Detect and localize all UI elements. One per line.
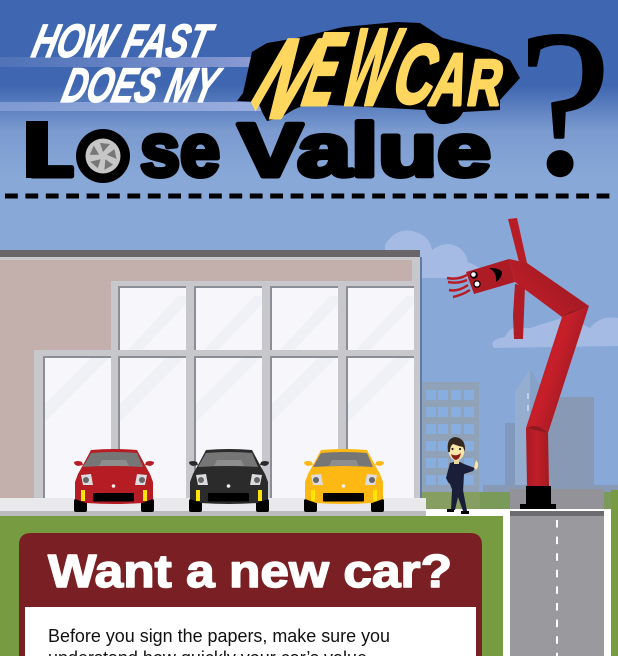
new car silhouette logo: R [462,47,509,120]
new car silhouette logo: A [423,38,480,121]
new car silhouette logo: W [328,6,414,129]
dealership building [0,250,422,507]
title: how fast does my: DOES MY [57,58,227,113]
dashed divider [5,194,610,198]
title: lose value: se [140,108,220,192]
black car [189,449,269,512]
panel: want a new car [19,533,482,656]
new car silhouette logo: N [223,16,345,143]
clouds [385,231,618,348]
red car [74,449,154,512]
new car silhouette logo: C [384,28,449,121]
title: lose value: Value [238,108,491,192]
speed streaks [0,57,262,111]
sidewalk [0,498,426,516]
lawn right [611,490,618,656]
road [426,509,611,656]
title: lose value: L [27,108,74,192]
title: lose value [26,108,491,192]
panel heading: Want a new car? [48,545,452,597]
new car silhouette logo [237,22,520,124]
lawn [0,516,503,656]
icon: wheel [76,129,130,183]
yellow car [304,449,384,512]
title: how fast does my: HOW FAST [27,16,219,68]
intro text: Before you sign the papers, make sure you [48,626,390,646]
new car silhouette logo: E [291,11,359,127]
background city [420,369,618,494]
inflatable tube man [447,218,589,509]
ground strip [420,489,618,510]
salesman [446,437,478,514]
title: how fast does my [27,16,227,113]
